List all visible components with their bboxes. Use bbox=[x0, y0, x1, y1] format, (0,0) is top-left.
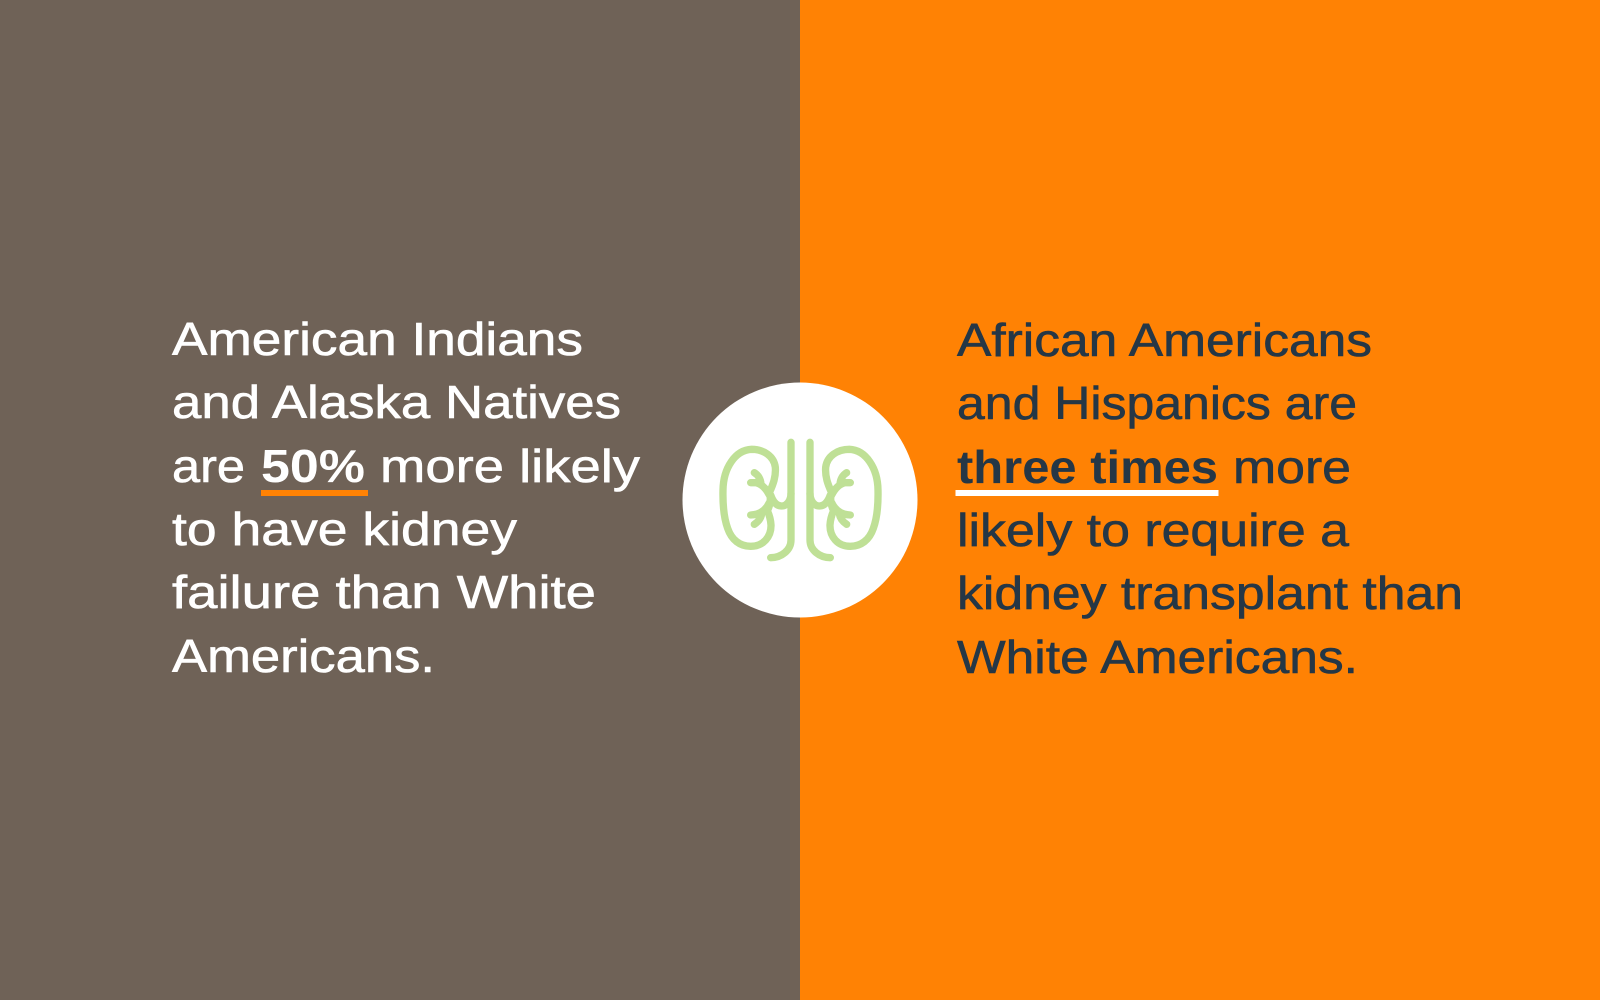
text block: American Indians and Alaska Natives statistic: to have kidney bbox=[172, 503, 517, 555]
underline: three times bbox=[956, 490, 1218, 496]
text block: African Americans and Hispanics statistic: likely to require a bbox=[957, 504, 1349, 556]
underline: 50% bbox=[261, 490, 368, 496]
panel: right orange bbox=[800, 0, 1600, 1000]
text block: American Indians and Alaska Natives statistic: are bbox=[172, 440, 245, 492]
text block: African Americans and Hispanics statistic bbox=[957, 314, 1463, 683]
text block: American Indians and Alaska Natives statistic: American Indians bbox=[172, 313, 583, 365]
text block: African Americans and Hispanics statistic: kidney transplant than bbox=[957, 567, 1463, 619]
text block: African Americans and Hispanics statistic: and Hispanics are bbox=[957, 377, 1357, 429]
text block: American Indians and Alaska Natives statistic bbox=[172, 313, 640, 682]
text block: African Americans and Hispanics statistic: White Americans. bbox=[957, 631, 1358, 683]
icon: kidneys bbox=[723, 442, 878, 558]
text block: American Indians and Alaska Natives statistic: Americans. bbox=[172, 630, 435, 682]
text block: American Indians and Alaska Natives statistic: and Alaska Natives bbox=[172, 376, 621, 428]
text block: African Americans and Hispanics statistic: African Americans bbox=[957, 314, 1372, 366]
text block: American Indians and Alaska Natives statistic: failure than White bbox=[172, 566, 596, 618]
text block: American Indians and Alaska Natives statistic: more likely bbox=[380, 440, 640, 492]
text block: American Indians and Alaska Natives statistic: 50% bbox=[261, 440, 365, 492]
panel: left brown bbox=[0, 0, 800, 1000]
text block: African Americans and Hispanics statistic: three times bbox=[957, 441, 1218, 493]
white center circle bbox=[682, 382, 918, 618]
text block: African Americans and Hispanics statistic: more bbox=[1233, 441, 1351, 493]
